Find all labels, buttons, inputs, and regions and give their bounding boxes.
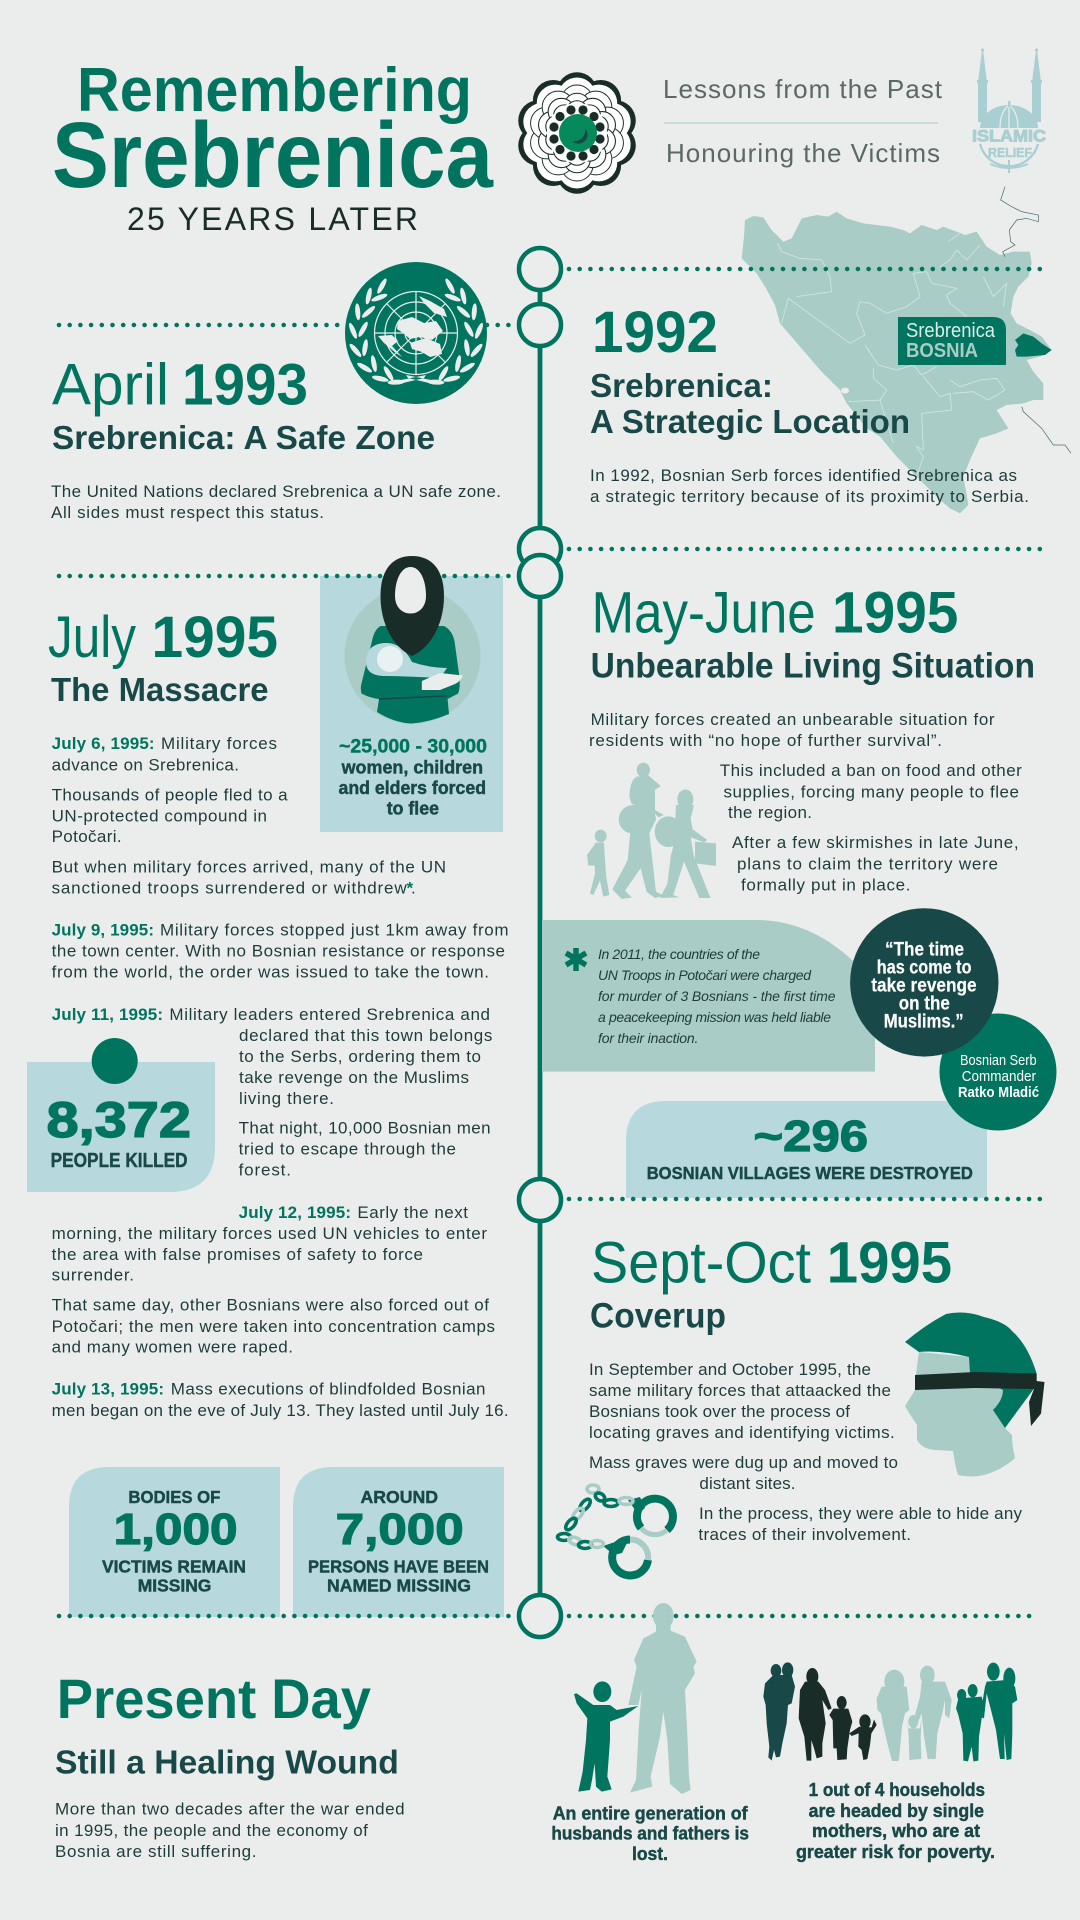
caption: single mothers: mothers, who are at <box>812 1820 980 1841</box>
body: July 12 <box>52 1203 495 1357</box>
tagline: Lessons from the Past <box>663 74 943 104</box>
body: July 6: Military forces <box>161 734 277 753</box>
map label: BOSNIA <box>906 340 978 362</box>
stat: bodies missing: VICTIMS REMAIN <box>102 1557 246 1577</box>
title: 25 YEARS LATER <box>127 201 418 237</box>
icon: father and son <box>574 1603 697 1794</box>
body: July 11: Military leaders entered Srebrenica and <box>169 1005 490 1024</box>
body text: In the process, they were able to hide any <box>699 1504 1022 1523</box>
body: July 9: the town center. With no Bosnian resistance or response <box>52 942 505 961</box>
body: July 6: . <box>411 878 416 898</box>
stat: people killed: PEOPLE KILLED <box>51 1149 188 1172</box>
caption: generation lost: An entire generation of <box>553 1802 748 1824</box>
attribution: Ratko Mladić <box>940 1014 1056 1130</box>
stat: displaced people: women, children <box>341 757 483 778</box>
stat: villages destroyed: ~296 <box>754 1112 868 1161</box>
heading: May-June 1995 <box>592 581 958 646</box>
icon: families <box>763 1662 1017 1761</box>
body: July 9: Military forces stopped just 1km away from <box>160 921 509 940</box>
subheading: The Massacre <box>51 671 269 708</box>
body: July 12: and many women were raped. <box>52 1338 293 1357</box>
caption: single mothers: 1 out of 4 households <box>809 1779 985 1800</box>
title: Srebrenica <box>52 103 494 207</box>
body: July 12: the area with false promises of safety to force <box>52 1245 423 1264</box>
icon: blindfolded head <box>905 1313 1044 1476</box>
heading: May-June 1995: 1995 <box>832 581 958 646</box>
body: July 6: But when military forces arrived, many of the UN <box>52 858 446 876</box>
stat: bodies missing: 1,000 <box>114 1505 238 1554</box>
body: July 13: men began on the eve of July 13. They lasted until July 16. <box>52 1401 509 1420</box>
stat: villages destroyed <box>647 1112 973 1183</box>
subheading: Still a Healing Wound <box>55 1744 399 1781</box>
heading: April 1993 <box>52 352 308 418</box>
quote: take revenge <box>871 976 977 997</box>
icon: fleeing family <box>587 763 716 899</box>
body text: formally put in place. <box>741 876 910 895</box>
body text: Military forces created an unbearable situation for <box>591 710 995 729</box>
attribution: Ratko Mladić: Bosnian Serb <box>960 1052 1037 1069</box>
stat: persons missing: AROUND <box>360 1487 438 1507</box>
map label <box>898 317 1052 365</box>
body text <box>55 1800 405 1861</box>
subheading: A Strategic Location <box>590 403 910 440</box>
quote: “The time <box>885 939 964 960</box>
map of Bosnia <box>742 187 1071 513</box>
panel: April 1993 <box>51 262 501 522</box>
body text: In 1992, Bosnian Serb forces identified Srebrenica as <box>590 466 1017 485</box>
body: July 6: advance on Srebrenica. <box>52 756 239 775</box>
body: July 11: to the Serbs, ordering them to <box>239 1047 481 1066</box>
body text: locating graves and identifying victims. <box>589 1423 895 1442</box>
logo: Islamic Relief: RELIEF <box>988 146 1032 160</box>
heading: May-June 1995: May-June <box>592 581 816 646</box>
heading: July 1995: July <box>48 605 136 670</box>
footnote text: UN Troops in Potočari were charged <box>598 967 812 983</box>
body text: More than two decades after the war ended <box>55 1800 405 1819</box>
stat box: 296 background <box>626 1101 987 1198</box>
panel: July 1995 <box>46 556 509 1596</box>
caption: single mothers <box>796 1779 995 1862</box>
body: July 11: take revenge on the Muslims <box>239 1068 469 1087</box>
body: July 11: forest. <box>239 1160 291 1180</box>
stat: bodies missing <box>102 1487 246 1596</box>
stat: bodies missing: BODIES OF <box>128 1487 221 1507</box>
caption: single mothers: greater risk for poverty. <box>796 1841 995 1862</box>
stat box: women and children background <box>320 576 503 832</box>
body: July 6: July 6, 1995: <box>52 734 155 753</box>
stat box: 8,372 background <box>27 1062 215 1192</box>
body text: a strategic territory because of its proximity to Serbia. <box>590 487 1029 506</box>
heading: Sept-Oct 1995 <box>591 1230 952 1295</box>
stat: displaced people <box>338 736 487 818</box>
heading: April 1993: 1993 <box>182 352 308 418</box>
icon: UN emblem <box>345 262 487 404</box>
body text <box>589 710 1022 895</box>
footnote text: for murder of 3 Bosnians - the first time <box>598 988 836 1004</box>
body: July 9 <box>52 921 509 982</box>
panel: 1992 <box>590 300 1052 506</box>
icon: Srebrenica flower <box>518 72 636 194</box>
body: July 12: Potočari; the men were taken into concentration camps <box>52 1317 495 1336</box>
attribution: Ratko Mladić: Ratko Mladić <box>958 1085 1039 1101</box>
subheading: Srebrenica: <box>590 367 773 404</box>
icon: handcuffs <box>558 1485 673 1575</box>
body: July 13 <box>52 1380 509 1420</box>
stat box: 7,000 background <box>293 1467 504 1617</box>
subheading: Unbearable Living Situation <box>591 647 1035 686</box>
body: July 11 <box>52 1005 492 1180</box>
stat: persons missing: 7,000 <box>336 1505 464 1554</box>
body: July 6: Potočari. <box>52 827 122 846</box>
heading: July 1995: 1995 <box>152 605 278 670</box>
body text: Mass graves were dug up and moved to <box>589 1453 898 1472</box>
quote: Muslims.” <box>884 1011 964 1032</box>
panel: footnote <box>542 920 875 1072</box>
body text: In September and October 1995, the <box>589 1360 871 1379</box>
body: July 12: surrender. <box>52 1266 134 1284</box>
body: July 9: July 9, 1995: <box>52 921 154 940</box>
quote: on the <box>899 994 950 1015</box>
body: July 12: morning, the military forces used UN vehicles to enter <box>52 1224 487 1243</box>
subheading: Coverup <box>590 1297 726 1336</box>
subheading: Srebrenica: A Safe Zone <box>52 419 435 456</box>
footnote text: for their inaction. <box>598 1030 698 1046</box>
heading: 1992: 1992 <box>592 300 718 365</box>
body text: traces of their involvement. <box>698 1525 911 1544</box>
body text: plans to claim the territory were <box>737 854 998 874</box>
attribution: Ratko Mladić: Commander <box>962 1068 1036 1085</box>
body: July 13: July 13, 1995: <box>52 1380 164 1399</box>
stat: persons missing: PERSONS HAVE BEEN <box>308 1557 489 1577</box>
body text: distant sites. <box>699 1474 796 1493</box>
body: July 11: declared that this town belongs <box>239 1026 492 1045</box>
body text: supplies, forcing many people to flee <box>724 783 1019 802</box>
footnote text: In 2011, the countries of the <box>598 946 760 962</box>
caption: generation lost: lost. <box>632 1843 668 1864</box>
body text <box>589 1360 1022 1544</box>
icon: asterisk <box>566 948 586 971</box>
illustration: woman with baby <box>344 556 480 724</box>
tagline <box>663 74 943 168</box>
stat: displaced people: ~25,000 - 30,000 <box>339 736 487 758</box>
timeline connectors <box>59 248 1044 1637</box>
body text: the region. <box>728 803 812 822</box>
title <box>52 56 494 237</box>
body text <box>590 466 1029 506</box>
heading: Sept-Oct 1995: Sept-Oct <box>591 1230 811 1295</box>
map label: Srebrenica <box>906 320 996 342</box>
body: July 6: * <box>406 878 414 898</box>
body text: The United Nations declared Srebrenica a UN safe zone. <box>51 482 501 501</box>
heading: Sept-Oct 1995: 1995 <box>827 1230 952 1295</box>
body text: Bosnians took over the process of <box>589 1402 850 1421</box>
stat box: 1,000 background <box>69 1467 280 1617</box>
body text: After a few skirmishes in late June, <box>732 833 1019 852</box>
caption: single mothers: are headed by single <box>809 1800 984 1821</box>
heading: Present Day: Present Day <box>57 1667 371 1730</box>
body: July 11: That night, 10,000 Bosnian men <box>239 1118 491 1137</box>
stat: persons missing: NAMED MISSING <box>327 1576 471 1596</box>
panel: May-June 1995 <box>542 581 1056 1183</box>
body: July 11: living there. <box>239 1089 334 1108</box>
body text: in 1995, the people and the economy of <box>55 1821 368 1840</box>
body: July 12: July 12, 1995: <box>239 1203 351 1222</box>
body: July 12: That same day, other Bosnians were also forced out of <box>52 1296 489 1315</box>
body: July 6 <box>52 734 446 898</box>
footnote text <box>598 946 836 1046</box>
title: Remembering <box>77 56 472 125</box>
stat: villages destroyed: BOSNIAN VILLAGES WERE DESTROYED <box>647 1163 973 1183</box>
stat: displaced people: to flee <box>387 797 439 818</box>
body: July 6: sanctioned troops surrendered or withdrew <box>52 878 407 898</box>
stat: people killed: 8,372 <box>46 1092 191 1148</box>
body text <box>51 482 501 522</box>
stat: displaced people: and elders forced <box>338 777 486 798</box>
panel: Present Day <box>55 1603 1017 1864</box>
caption: generation lost <box>551 1802 749 1864</box>
body: July 13: Mass executions of blindfolded Bosnian <box>171 1380 486 1399</box>
heading: April 1993: April <box>52 352 169 418</box>
logo: Islamic Relief <box>972 48 1046 173</box>
body: July 11: tried to escape through the <box>239 1140 456 1158</box>
footnote text: a peacekeeping mission was held liable <box>598 1009 831 1025</box>
tagline: Honouring the Victims <box>666 138 940 168</box>
stat: persons missing <box>308 1487 489 1596</box>
panel: Sept-Oct 1995 <box>558 1230 1044 1575</box>
stat: people killed <box>46 1038 191 1172</box>
heading: July 1995 <box>48 605 278 670</box>
body text: Bosnia are still suffering. <box>55 1842 256 1861</box>
body: July 11: July 11, 1995: <box>52 1005 163 1024</box>
logo: Islamic Relief: ISLAMIC <box>972 126 1046 146</box>
body text: residents with “no hope of further survival”. <box>589 731 942 750</box>
quote: has come to <box>877 958 972 978</box>
body text: All sides must respect this status. <box>51 503 324 522</box>
body text: This included a ban on food and other <box>720 761 1022 780</box>
body: July 6: UN-protected compound in <box>52 806 267 826</box>
body: July 9: from the world, the order was issued to take the town. <box>52 963 489 982</box>
body: July 6: Thousands of people fled to a <box>52 786 288 804</box>
stat: bodies missing: MISSING <box>138 1576 211 1596</box>
caption: generation lost: husbands and fathers is <box>551 1823 749 1844</box>
quote <box>850 908 998 1057</box>
subheading <box>590 367 910 440</box>
body: July 12: Early the next <box>357 1203 468 1222</box>
body text: same military forces that attaacked the <box>589 1381 891 1400</box>
